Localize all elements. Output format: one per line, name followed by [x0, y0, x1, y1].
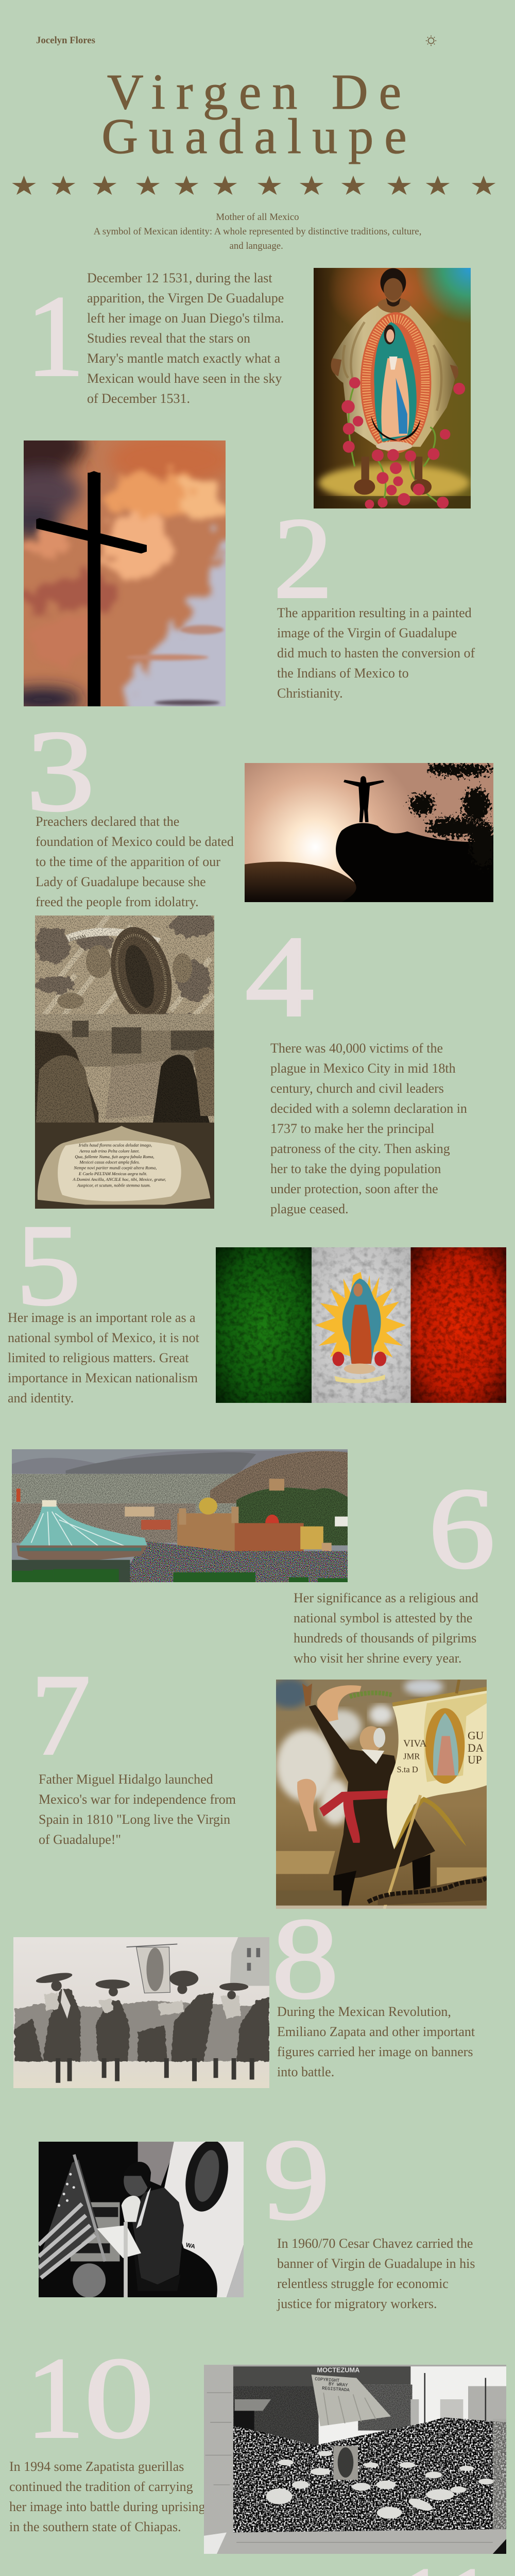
number 4: 4: [245, 912, 314, 1041]
text: point 6: hundreds of thousands of pilgrims: [294, 1631, 476, 1646]
text: point 1: Mary's mantle match exactly what a: [87, 351, 280, 366]
text: point 5: and identity.: [8, 1391, 74, 1405]
text: point 1: left her image on Juan Diego's tilma.: [87, 311, 284, 326]
row of stars: [12, 176, 495, 195]
text: point 10: In 1994 some Zapatista guerillas: [9, 2459, 184, 2474]
text: point 7: Father Miguel Hidalgo launched: [39, 1772, 213, 1787]
image: Juan Diego with the Virgin on his tilma: [314, 268, 471, 509]
text: point 3: to the time of the apparition of our: [36, 854, 220, 869]
text: point 2: did much to hasten the conversion of: [277, 646, 475, 660]
title: Virgen De: [107, 64, 412, 120]
image: engraving of the Virgin over plague-stricken Mexico City: A Domini Ancilla, ANCILE hoc, tibi, Mexice, gratur,: [72, 1177, 166, 1182]
image: painting of Hidalgo raising the Guadalupe banner: UP: [468, 1754, 482, 1766]
text: point 4: plague in Mexico City in mid 18th: [270, 1061, 456, 1076]
text: point 6: Her significance as a religious and: [294, 1590, 478, 1605]
number 8: 8: [272, 1894, 338, 2023]
image: engraving of the Virgin over plague-stricken Mexico City: [35, 916, 214, 1209]
text: point 7: Spain in 1810 "Long live the Virgin: [39, 1812, 230, 1827]
icon: sun: [425, 35, 437, 46]
text: point 7: Mexico's war for independence from: [39, 1792, 236, 1807]
number 3: 3: [26, 706, 95, 835]
title: Guadalupe: [101, 109, 418, 164]
text: point 2: the Indians of Mexico to: [277, 666, 409, 681]
text: point 5: limited to religious matters. Great: [8, 1350, 189, 1365]
image: painting of Hidalgo raising the Guadalupe banner: [276, 1680, 487, 1909]
image: painting of Hidalgo raising the Guadalupe banner: VIVA: [403, 1738, 427, 1749]
image: engraving of the Virgin over plague-stricken Mexico City: E Caelo PELTAM Mexicus aegra tulit.: [78, 1171, 147, 1176]
image: engraving of the Virgin over plague-stricken Mexico City: Iridis haud florens oculos deludat imago,: [78, 1142, 152, 1147]
text: point 4: There was 40,000 victims of the: [270, 1041, 443, 1056]
text: point 9: banner of Virgin de Guadalupe in his: [277, 2256, 475, 2271]
text: point 7: [39, 1769, 236, 1850]
image: Basilica of Guadalupe aerial view with crowds: [12, 1449, 348, 1582]
text: point 8: During the Mexican Revolution,: [277, 2004, 451, 2019]
number 10: 1: [26, 2333, 84, 2462]
image: cross against a sunset sky: [24, 440, 226, 706]
image: Mexican flag with the Virgin: [216, 1247, 506, 1403]
text: point 1: Mexican would have seen in the sky: [87, 371, 282, 386]
text: point 6: national symbol is attested by the: [294, 1611, 472, 1625]
text: point 5: Her image is an important role as a: [8, 1310, 196, 1325]
text: point 4: her to take the dying population: [270, 1161, 441, 1176]
text: point 2: image of the Virgin of Guadalupe: [277, 625, 457, 640]
text: point 9: relentless struggle for economic: [277, 2276, 449, 2291]
number 5: 5: [16, 1200, 81, 1329]
text: point 8: [277, 2002, 475, 2082]
text: point 3: [36, 814, 234, 909]
image: engraving of the Virgin over plague-stricken Mexico City: Mexicei casus edocet ampla fides.: [79, 1160, 140, 1165]
text: point 9: justice for migratory workers.: [277, 2296, 437, 2311]
subtitle: and language.: [230, 241, 283, 251]
text: point 6: [294, 1590, 478, 1666]
image: crowd of horsemen in sombreros with a Guadalupe banner: COPYRIGHT: [315, 2377, 340, 2383]
text: point 5: national symbol of Mexico, it is not: [8, 1330, 199, 1345]
image: crowd of horsemen in sombreros with a Guadalupe banner: [204, 2365, 506, 2554]
image: engraving of the Virgin over plague-stricken Mexico City: Nempe novi pariter mundi coepit altera Roma,: [73, 1165, 157, 1170]
text: point 1: Studies reveal that the stars on: [87, 331, 250, 346]
text: point 10: in the southern state of Chiapas.: [9, 2519, 181, 2534]
text: point 5: [8, 1310, 199, 1405]
image: painting of Hidalgo raising the Guadalupe banner: GU: [468, 1730, 484, 1742]
text: point 8: figures carried her image on banners: [277, 2044, 473, 2059]
image: crowd of horsemen in sombreros with a Guadalupe banner: BY WRAY: [329, 2382, 348, 2388]
number 7: 7: [31, 1650, 91, 1778]
subtitle: Mother of all Mexico: [216, 212, 299, 223]
image: engraving of the Virgin over plague-stricken Mexico City: Auspicor, et scutum, nobile stemma tuum.: [77, 1182, 151, 1188]
text: point 2: [277, 605, 475, 701]
text: point 4: decided with a solemn declaration in: [270, 1101, 467, 1116]
text: point 4: century, church and civil leaders: [270, 1081, 444, 1096]
text: point 3: foundation of Mexico could be dated: [36, 834, 234, 849]
text: point 1: December 12 1531, during the last: [87, 270, 272, 285]
text: point 1: apparition, the Virgen De Guadalupe: [87, 291, 284, 306]
text: point 1: [87, 270, 284, 406]
text: point 3: Preachers declared that the: [36, 814, 179, 829]
number 2: 2: [273, 494, 333, 622]
text: point 3: Lady of Guadalupe because she: [36, 874, 206, 889]
text: point 10: her image into battle during uprising: [9, 2499, 205, 2514]
text: point 2: The apparition resulting in a painted: [277, 605, 472, 620]
text: point 7: of Guadalupe!": [39, 1832, 121, 1847]
image: engraving of the Virgin over plague-stricken Mexico City: PELTAM: [70, 934, 87, 942]
number 9: 9: [263, 2114, 330, 2243]
text: point 4: [270, 1041, 467, 1216]
text: point 2: Christianity.: [277, 686, 343, 701]
image: Cesar Chavez speaking at a microphone: [39, 2142, 244, 2297]
image: engraving of the Virgin over plague-stricken Mexico City: Qua, fallente Numa, fuit aegra fabula Roma,: [75, 1154, 154, 1159]
subtitle: [94, 212, 421, 251]
text: point 4: patroness of the city. Then asking: [270, 1141, 450, 1156]
text: point 6: who visit her shrine every year.: [294, 1651, 461, 1666]
text: point 4: 1737 to make her the principal: [270, 1121, 434, 1136]
image: crowd of horsemen in sombreros with a Guadalupe banner: MOCTEZUMA: [317, 2366, 359, 2374]
text: point 3: freed the people from idolatry.: [36, 894, 199, 909]
subtitle: A symbol of Mexican identity: A whole represented by distinctive traditions, culture,: [94, 226, 421, 237]
text: point 4: plague ceased.: [270, 1201, 349, 1216]
text: point 9: In 1960/70 Cesar Chavez carried the: [277, 2236, 473, 2251]
author name: Jocelyn Flores: [36, 35, 95, 46]
number 6: 6: [428, 1463, 495, 1592]
image: engraving of the Virgin over plague-stricken Mexico City: Aerea sub trino Pelta colore latet.: [79, 1148, 140, 1154]
text: point 8: into battle.: [277, 2064, 334, 2079]
image: painting of Hidalgo raising the Guadalupe banner: S.ta D: [397, 1765, 418, 1774]
image: painting of Hidalgo raising the Guadalupe banner: JMR: [403, 1751, 420, 1761]
title: [101, 64, 418, 164]
text: point 10: [9, 2456, 205, 2537]
text: point 8: Emiliano Zapata and other important: [277, 2024, 475, 2039]
image: man with raised arms on a rock at sunset: [245, 763, 493, 902]
number 10: [26, 2340, 142, 2455]
image: Zapatista horsemen with Guadalupe banner: [13, 1937, 269, 2088]
number 1: 1: [26, 271, 84, 400]
text: point 5: importance in Mexican nationalism: [8, 1370, 198, 1385]
image: crowd of horsemen in sombreros with a Guadalupe banner: REGISTRADA: [322, 2386, 350, 2393]
text: point 1: of December 1531.: [87, 391, 190, 406]
number 10: 0: [84, 2333, 153, 2462]
text: point 4: under protection, soon after the: [270, 1181, 438, 1196]
image: Cesar Chavez speaking at a microphone: WA: [185, 2242, 196, 2250]
text: point 10: continued the tradition of carrying: [9, 2479, 193, 2494]
text: point 9: [277, 2233, 475, 2314]
image: painting of Hidalgo raising the Guadalupe banner: DA: [468, 1742, 484, 1754]
